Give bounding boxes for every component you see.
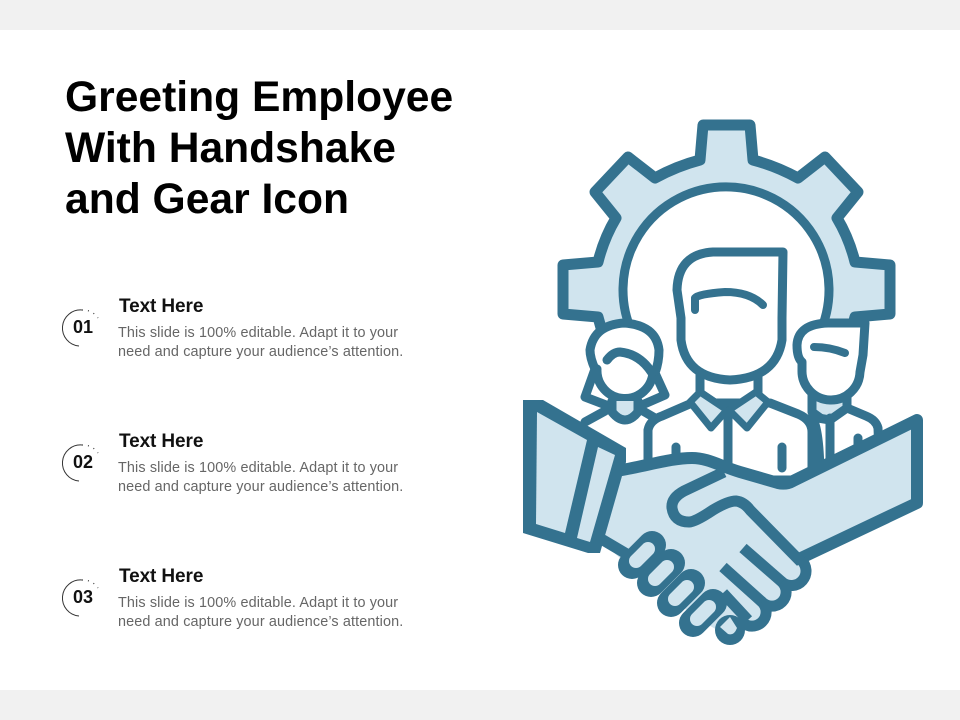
list item 01: need and capture your audience’s attention. bbox=[118, 344, 403, 360]
icon: handshake bbox=[523, 400, 917, 645]
list item 03: This slide is 100% editable. Adapt it to your bbox=[118, 595, 398, 611]
hand outline top and right sleeve bbox=[622, 420, 917, 558]
list item 03 bbox=[62, 566, 403, 630]
figure: woman bbox=[585, 323, 665, 480]
list item 02: Text Here bbox=[119, 431, 203, 452]
figure: central man bbox=[648, 252, 812, 480]
icon: gear bbox=[563, 125, 890, 420]
title: With Handshake bbox=[65, 124, 396, 172]
list item 03: 03 bbox=[73, 587, 93, 607]
list item 01: This slide is 100% editable. Adapt it to your bbox=[118, 325, 398, 341]
list item 01 bbox=[62, 296, 403, 360]
left hand knuckles bbox=[632, 545, 652, 565]
list item 02: need and capture your audience’s attention. bbox=[118, 478, 403, 494]
thumb bbox=[672, 472, 801, 562]
hands fill bbox=[600, 420, 917, 638]
right hand fingertips bbox=[742, 560, 806, 626]
list item 02: This slide is 100% editable. Adapt it to your bbox=[118, 460, 398, 476]
title: Greeting Employee bbox=[65, 73, 453, 121]
left sleeve bbox=[523, 400, 626, 553]
little finger bump bbox=[715, 615, 745, 645]
list item 01: 01 bbox=[73, 317, 93, 337]
title: and Gear Icon bbox=[65, 175, 349, 223]
list item 02 bbox=[62, 431, 403, 494]
list item 02: 02 bbox=[73, 452, 93, 472]
list item 03: need and capture your audience’s attention. bbox=[118, 614, 403, 630]
title bbox=[65, 73, 453, 223]
list item 01: Text Here bbox=[119, 296, 203, 317]
finger separators bbox=[723, 548, 782, 620]
list item 03: Text Here bbox=[119, 566, 203, 587]
figure: man on the right bbox=[797, 323, 880, 480]
